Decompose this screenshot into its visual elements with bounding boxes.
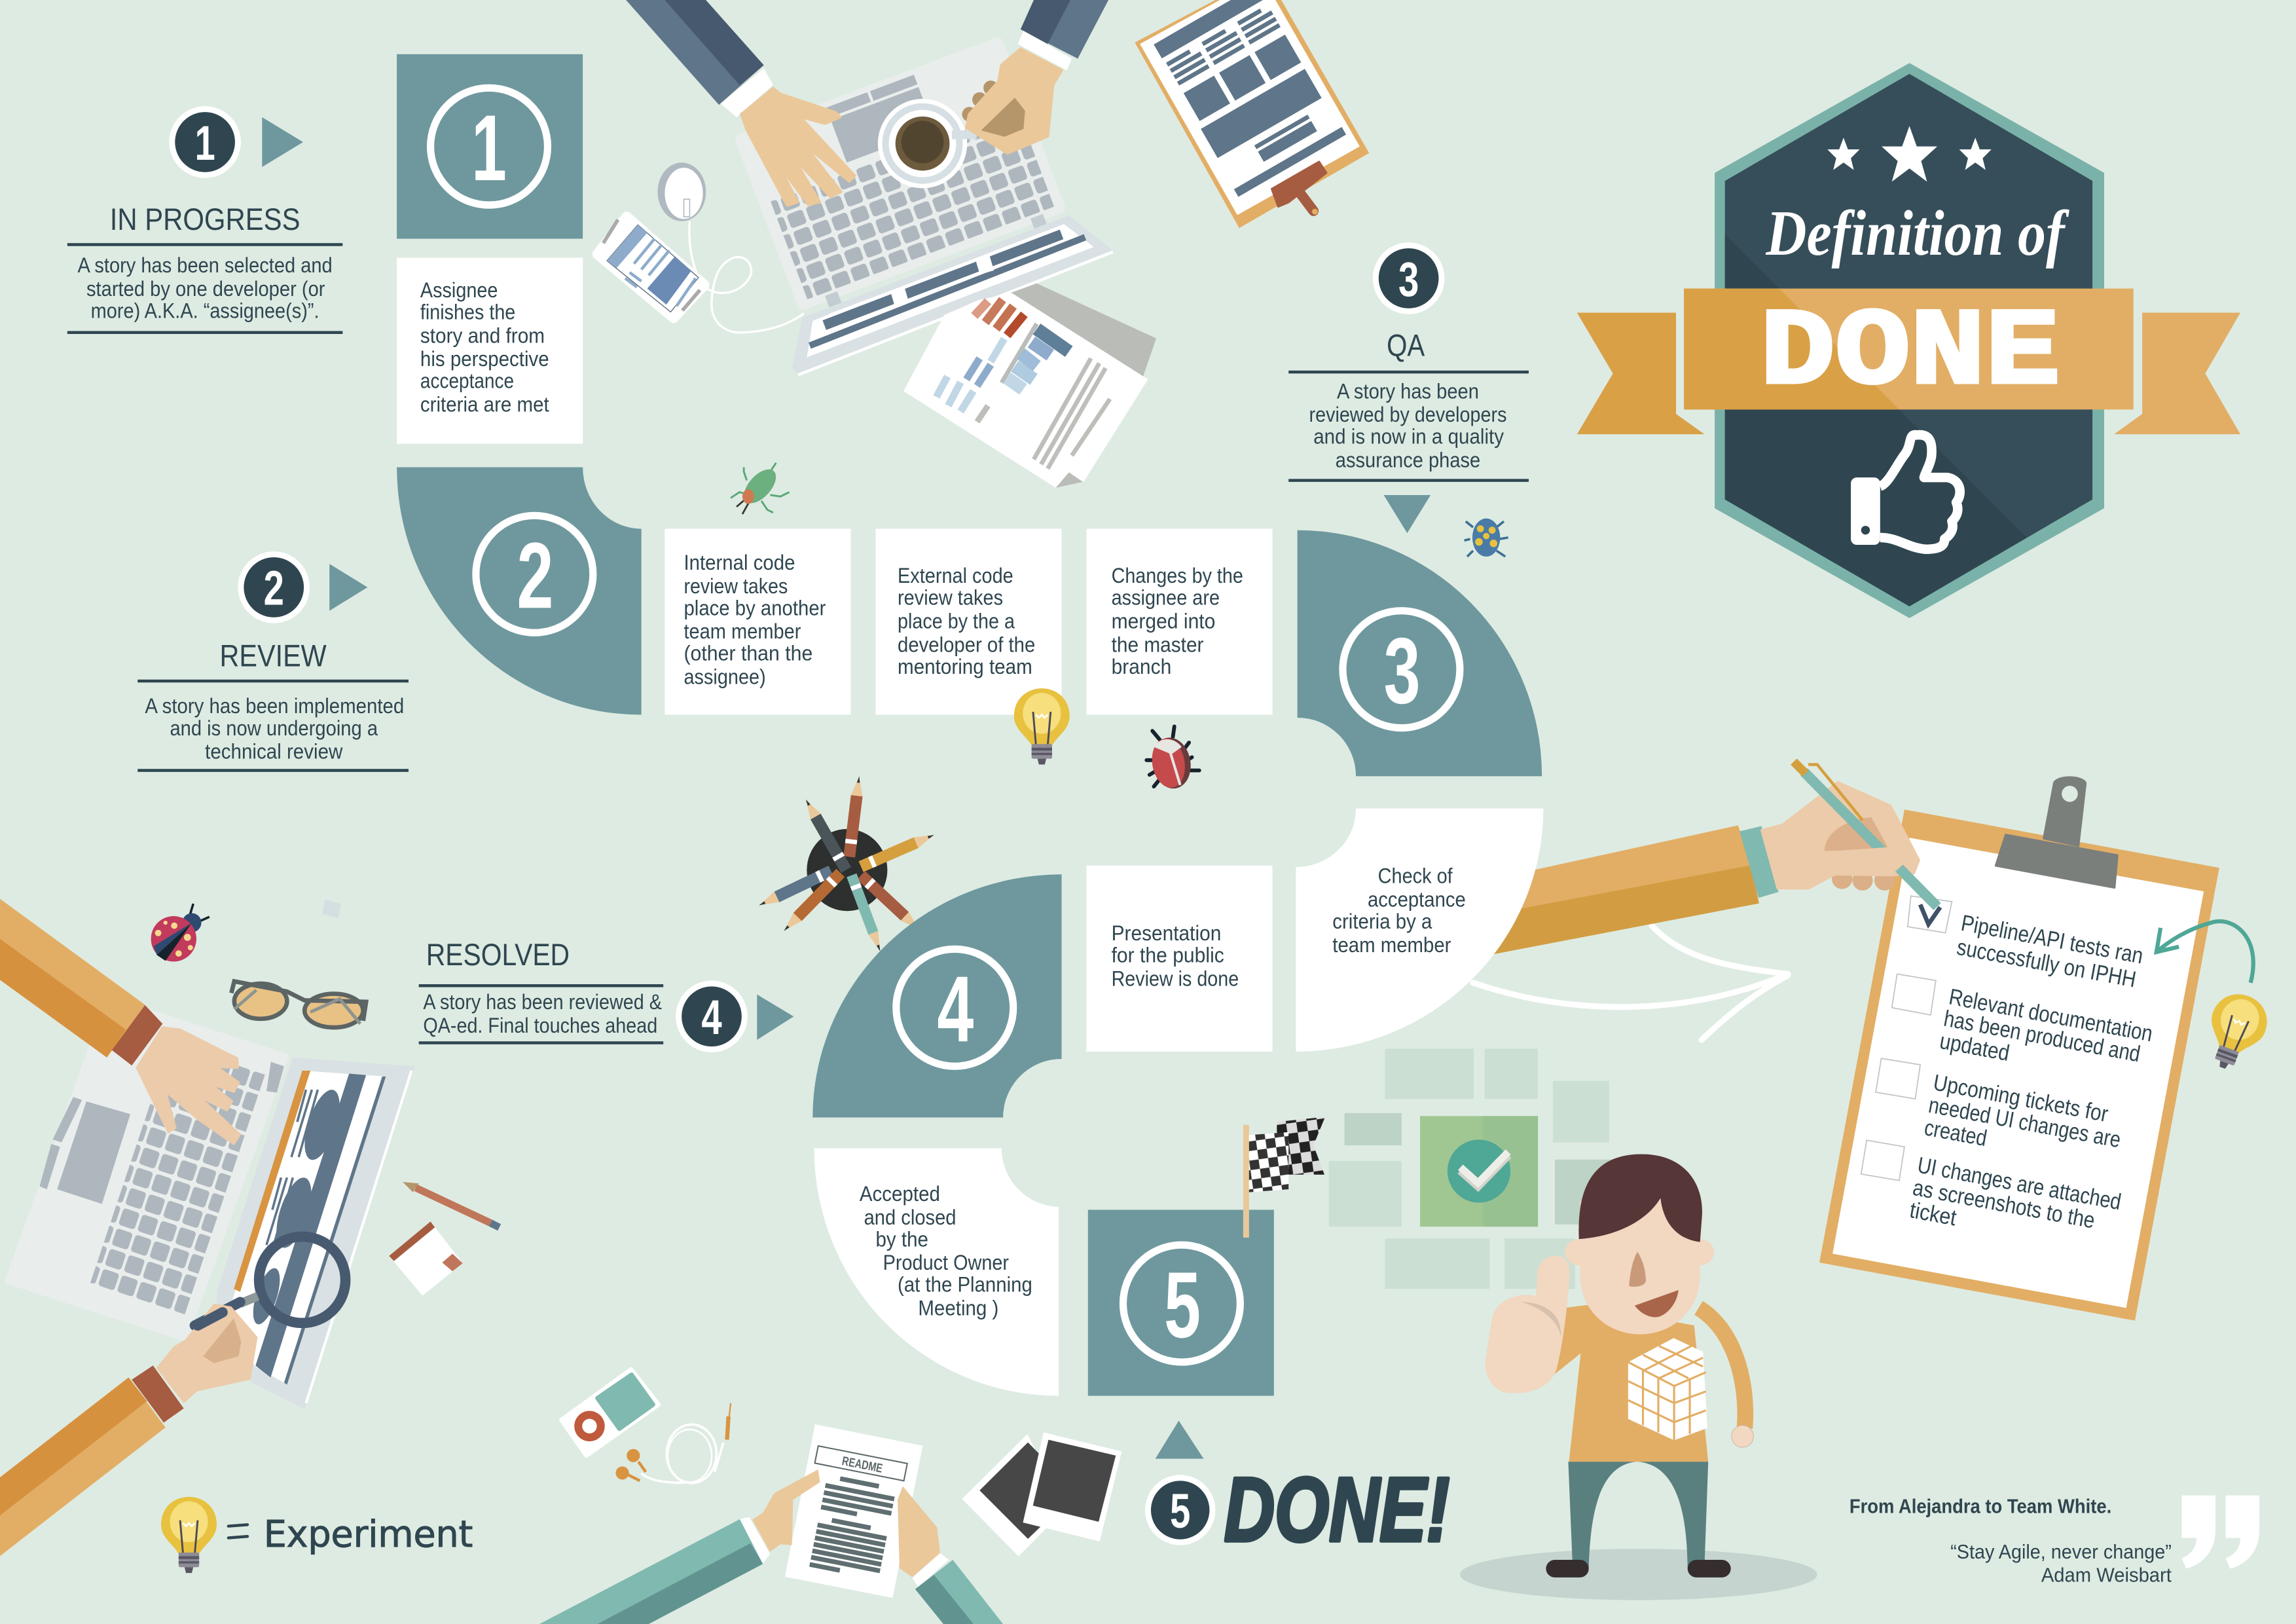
item 3 [1922, 1070, 2123, 1153]
arrow 3 [1384, 495, 1430, 533]
panel: accepted and closed: (at the Planning [898, 1273, 1032, 1297]
card: internal code review: team member [683, 619, 801, 643]
panel: accepted and closed: Product Owner [883, 1251, 1009, 1274]
card: presentation for public review: Presentation [1112, 921, 1221, 945]
panel 2: review step [397, 468, 1273, 714]
panel 3: QA step [1298, 530, 1542, 776]
clipboard clip [1995, 776, 2117, 887]
description 4: QA-ed. Final touches ahead [423, 1014, 657, 1037]
card: presentation for public review: for the public [1112, 943, 1224, 967]
icon: pencil [403, 1182, 500, 1227]
pencil slate [756, 866, 833, 911]
illustration: clipboard top right [1135, 0, 1369, 228]
icon: ladybug [151, 904, 210, 961]
arrow: green curved [2157, 921, 2253, 983]
panel: check of acceptance criteria [1296, 809, 1543, 1052]
card: merged into master: assignee are [1112, 586, 1220, 610]
card: merged into master [1087, 528, 1273, 714]
card: internal code review: place by another [683, 596, 826, 619]
legend: experiment [161, 1497, 473, 1573]
laptop screen [792, 215, 1113, 375]
panel 4: resolved step [812, 874, 1062, 1118]
icon: experiment bulb right [2196, 987, 2274, 1077]
readme label [815, 1446, 907, 1481]
readme paper [785, 1424, 922, 1598]
description 2 [137, 681, 409, 770]
badge 3: 3 [1398, 252, 1419, 306]
description 2: and is now undergoing a [170, 716, 378, 740]
illustration: left laptop with hands [0, 899, 414, 1556]
panel: accepted and closed: Meeting ) [918, 1296, 998, 1320]
hexagon shield [1715, 63, 2104, 618]
step 1 text card: criteria are met [420, 393, 549, 416]
checkbox 4 [1861, 1140, 1904, 1181]
attribution text: From Alejandra to Team White. [1850, 1496, 2111, 1517]
thumbs-up hand [1485, 1256, 1570, 1393]
readme label: README [841, 1454, 884, 1476]
green check tile [1420, 1116, 1538, 1227]
label 3: QA [1288, 242, 1529, 533]
card: presentation for public review [1087, 866, 1273, 1052]
arrow 4 [757, 995, 793, 1040]
panel 5: done step tile: 5 [1164, 1253, 1201, 1357]
panel: accepted and closed: by the [875, 1227, 928, 1251]
icon: closing quote mark [2182, 1496, 2259, 1568]
ears [1565, 1239, 1714, 1265]
icon: smartphone [598, 217, 704, 318]
description 3: assurance phase [1336, 449, 1480, 472]
step 2 quarter shape [397, 468, 642, 714]
card: merged into master: Changes by the [1112, 564, 1243, 587]
equals sign [228, 1524, 247, 1538]
top-left arm and hand [0, 899, 240, 1144]
pencil dark [801, 796, 851, 873]
description 3 [1288, 372, 1529, 481]
item 4: as screenshots to the [1911, 1175, 2097, 1234]
illustration: polaroid photos [962, 1432, 1121, 1557]
bottom-left arm and hand [0, 1304, 258, 1556]
panel: accepted and closed [814, 1149, 1059, 1396]
stars [1827, 126, 1992, 181]
label 1: in progress [67, 106, 342, 333]
badge 4 [676, 980, 748, 1052]
pencil orange [780, 869, 845, 935]
laptop screen [217, 1058, 414, 1409]
left sleeve and hand [626, 0, 855, 206]
card: internal code review: (other than the [683, 642, 812, 665]
face [1580, 1201, 1700, 1335]
label 5: done [1145, 1421, 1449, 1560]
clipboard board [1819, 809, 2219, 1321]
icon: notepad [389, 1221, 463, 1296]
panel: accepted and closed: Accepted [860, 1182, 940, 1206]
icon: glasses [231, 982, 366, 1027]
title: definition of: Definition of [1765, 198, 2069, 269]
icon: experiment bulb on review card [1014, 688, 1070, 765]
item 2: updated [1938, 1029, 2011, 1066]
card: external code review: place by the a [898, 610, 1015, 633]
description 2: technical review [205, 740, 343, 764]
mouth [1635, 1290, 1679, 1318]
ribbon [1577, 289, 2240, 434]
card: internal code review: review takes [683, 574, 788, 598]
illustration: standing developer [1460, 1154, 1817, 1600]
badge 1 [169, 106, 241, 178]
card: internal code review [665, 528, 850, 714]
card: merged into master: merged into [1112, 610, 1215, 633]
panel: accepted and closed: and closed [864, 1206, 957, 1229]
badge 1: 1 [194, 116, 215, 170]
panel 3: QA step: 3 [1384, 619, 1421, 724]
step 1 text card [397, 258, 583, 444]
card: presentation for public review: Review is done [1112, 967, 1239, 990]
coffee cup [878, 99, 977, 188]
clipboard paper [1832, 838, 2204, 1308]
right sleeve and hand [962, 0, 1108, 153]
check mark [1920, 904, 1941, 924]
background block grid with check [1329, 1048, 1611, 1289]
pencil brown two [857, 871, 923, 934]
pencil brown [843, 775, 865, 858]
icon: blue bug [1465, 519, 1508, 557]
panel: check of acceptance criteria: Check of [1378, 864, 1453, 888]
step 1 text card: story and from [420, 323, 545, 347]
step 1 text card: Assignee [420, 278, 498, 302]
card: external code review: mentoring team [898, 655, 1032, 678]
shoes [1546, 1560, 1731, 1578]
step 1 number tile: 1 [471, 96, 507, 200]
badge 2 [238, 551, 310, 623]
card: internal code review: Internal code [683, 551, 795, 574]
panel 4: resolved step: 4 [937, 957, 974, 1061]
step 1 text card: acceptance [420, 369, 514, 393]
laptop base [7, 998, 287, 1339]
heading: done exclamation: DONE! [1224, 1459, 1449, 1560]
item 2: has been produced and [1942, 1006, 2142, 1067]
panel 1: in progress step [397, 54, 583, 444]
description 2: A story has been implemented [145, 694, 404, 718]
legend text: Experiment [264, 1513, 473, 1556]
badge 2: 2 [264, 561, 284, 616]
checkbox 3 [1876, 1058, 1920, 1099]
card: external code review: developer of the [898, 633, 1035, 656]
right arm [1698, 1308, 1745, 1428]
card: external code review [875, 528, 1062, 714]
heading: in progress: IN PROGRESS [110, 202, 301, 236]
description 3: and is now in a quality [1313, 425, 1504, 449]
nose [1629, 1252, 1646, 1287]
panel: check of acceptance criteria: criteria by a [1332, 910, 1432, 933]
panel: check of acceptance criteria: acceptance [1368, 887, 1466, 911]
label 4: resolved [419, 937, 793, 1052]
illustration: hands holding README [539, 1424, 1003, 1624]
card: external code review: External code [898, 564, 1013, 587]
checkbox 2 [1892, 974, 1936, 1015]
icon: legend bulb [161, 1497, 217, 1573]
pencil teal [847, 874, 885, 953]
step 1 number tile [397, 54, 583, 239]
heading: review: REVIEW [219, 638, 327, 673]
badge emblem: definition of done [1577, 63, 2240, 618]
rubik cube on shirt [1628, 1338, 1707, 1441]
badge 5 [1145, 1475, 1215, 1545]
badge 3 [1373, 242, 1444, 314]
arrow 2 [329, 564, 367, 611]
panel: check of acceptance criteria: team member [1332, 933, 1451, 957]
arrow 1 [262, 117, 303, 167]
decorative tile [322, 899, 341, 918]
item 1: Pipeline/API tests ran [1959, 911, 2145, 969]
item 4: ticket [1908, 1198, 1959, 1231]
arrow 5 [1156, 1421, 1203, 1459]
pencil yellow [859, 830, 936, 872]
illustration: pencil cup [756, 775, 936, 953]
right hand and sleeve [898, 1486, 1003, 1624]
description 1 [67, 245, 342, 333]
mouse cable [689, 221, 804, 333]
icon: computer mouse [657, 162, 706, 221]
description 4: A story has been reviewed & [423, 990, 662, 1014]
ground shadow [1460, 1549, 1817, 1600]
legs [1568, 1462, 1708, 1567]
step 1 text card: his perspective [420, 347, 549, 371]
item 3: needed UI changes are [1927, 1093, 2123, 1153]
icon: red bug [1146, 726, 1199, 792]
heading: resolved: RESOLVED [426, 937, 570, 972]
icon: green bug [731, 463, 790, 514]
description 3: A story has been [1337, 379, 1479, 403]
icon: music player and earphones [562, 1369, 731, 1483]
description 1: started by one developer (or [86, 277, 325, 301]
laptop base [734, 36, 1070, 320]
arrow: white curved arrow to clipboard [1473, 926, 1788, 1040]
badge 5: 5 [1170, 1484, 1190, 1538]
label 2: review [137, 551, 409, 770]
item 2: Relevant documentation [1947, 984, 2155, 1046]
card: external code review: review takes [898, 586, 1003, 610]
hair [1578, 1154, 1702, 1242]
attribution text: “Stay Agile, never change” [1950, 1541, 2172, 1563]
step 2 quarter shape: 2 [517, 523, 553, 628]
shirt [1552, 1305, 1708, 1462]
checkbox 1 [1908, 896, 1952, 933]
title: done: DONE [1760, 292, 2060, 415]
description 4 [419, 986, 663, 1043]
heading: QA: QA [1387, 328, 1425, 363]
description 3: reviewed by developers [1309, 403, 1506, 426]
magnifying glass [194, 1236, 346, 1325]
step 1 text card: finishes the [420, 301, 515, 324]
illustration: orange sleeve arm to pen [1493, 825, 1759, 954]
illustration: clipboard checklist [1819, 776, 2219, 1321]
icon: thumbs up [1851, 435, 1960, 549]
icon: checkered flag [1243, 1116, 1325, 1238]
left hand and sleeve [539, 1469, 820, 1624]
panel 5: done step tile [1088, 1209, 1274, 1396]
illustration: top laptop with hands [626, 0, 1113, 375]
description 1: more) A.K.A. “assignee(s)”. [91, 299, 319, 322]
item 1: successfully on IPHH [1955, 935, 2138, 993]
item 1 [1955, 911, 2145, 993]
item 3: Upcoming tickets for [1931, 1070, 2110, 1127]
badge 4: 4 [701, 990, 722, 1044]
attribution text: Adam Weisbart [2041, 1565, 2172, 1587]
attribution text [1850, 1496, 2172, 1587]
item 3: created [1922, 1115, 1989, 1151]
card: merged into master: the master [1112, 633, 1204, 656]
illustration: hand with pen [1740, 762, 1937, 906]
card: merged into master: branch [1112, 655, 1171, 678]
card: internal code review: assignee) [683, 665, 766, 689]
illustration: printed chart document [903, 284, 1156, 488]
description 1: A story has been selected and [78, 253, 333, 277]
item 4: UI changes are attached [1916, 1153, 2123, 1215]
